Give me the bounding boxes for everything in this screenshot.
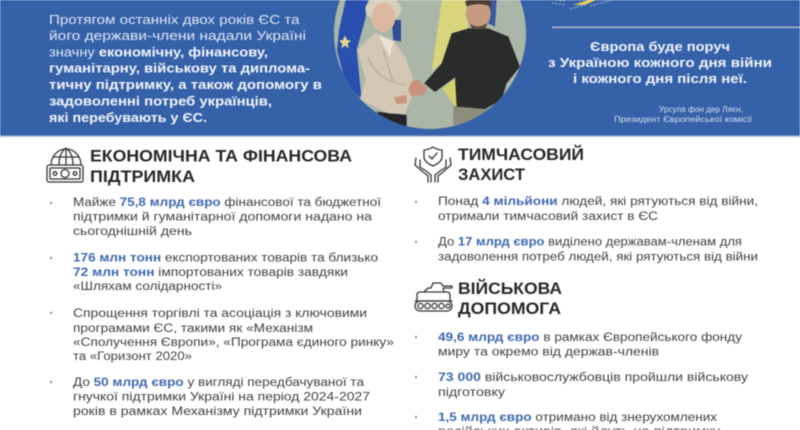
- bullet: 75.8 billion: підтримки й гуманітарної допомоги надано на: [73, 212, 373, 224]
- intro text block: значну економічну, фінансову,: [49, 46, 268, 60]
- heading: ТИМЧАСОВИЙ: [458, 145, 584, 164]
- bullet: 50 billion facility: [50, 377, 370, 418]
- bullet: 50 billion facility: гнучкої підтримки Україні на період 2024-2027: [73, 392, 370, 404]
- quote attribution: Урсула фон дер Ляєн,: [659, 105, 743, 114]
- bullet: trade and association: програмами ЄС, такими як «Механізм: [73, 323, 313, 335]
- panel: blue header band: [0, 0, 800, 140]
- photo: two leaders shaking hands: [330, 0, 530, 140]
- quote attribution: [614, 105, 753, 124]
- bullet: 50 billion facility: років в рамках Механізму підтримки України: [73, 406, 362, 418]
- bullet: 50 billion facility: До 50 млрд євро у вигляді передбачуваної та: [73, 377, 365, 389]
- bullet: solidarity lanes: «Шляхам солідарності»: [73, 281, 222, 293]
- heading: [458, 279, 562, 318]
- intro text block: гуманітарну, військову та диплома-: [49, 62, 310, 76]
- bullet: 73 000 troops: [415, 372, 748, 399]
- bullet: trade and association: [50, 308, 394, 363]
- bullet: 4 million: Понад 4 мільйони людей, які рятуються від війни,: [438, 196, 758, 208]
- bullet: trade and association: Спрощення торгівлі та асоціація з ключовими: [73, 308, 367, 320]
- panel: temporary protection: [415, 145, 758, 264]
- quote attribution: Президент Європейської комісії: [614, 115, 753, 124]
- bullet: trade and association: «Сполучення Європи», «Програма єдиного ринку»: [73, 337, 394, 349]
- intro text block: Протягом останніх двох років ЄС та: [49, 13, 300, 27]
- bullet: trade and association: та «Горизонт 2020»: [73, 351, 192, 363]
- bullet: 73 000 troops: підготовку: [438, 387, 505, 399]
- bullet: 49.6 billion: [415, 332, 742, 358]
- quote: з Україною кожного дня війни: [548, 55, 772, 70]
- bullet: 49.6 billion: миру та окремо від держав-членів: [438, 346, 659, 358]
- bullet: 75.8 billion: сьогоднішній день: [73, 226, 192, 238]
- intro text block: які перебувають у ЄС.: [49, 111, 207, 125]
- heading: [90, 146, 352, 186]
- bullet: 75.8 billion: Майже 75,8 млрд євро фінансової та бюджетної: [73, 197, 382, 209]
- intro text block: його держави-члени надали Україні: [49, 29, 306, 43]
- heading: [458, 145, 584, 184]
- bullet: 75.8 billion: [50, 197, 382, 238]
- heading: ВІЙСЬКОВА: [458, 279, 562, 298]
- bullet: solidarity lanes: 72 млн тонн імпортованих товарів завдяки: [73, 267, 348, 279]
- bullet: 1.5 billion: 1,5 млрд євро отримано від знерухомлених: [438, 412, 717, 424]
- icon: tank: [415, 283, 452, 311]
- bullet: 17 billion: [415, 236, 758, 264]
- bullet: 73 000 troops: 73 000 військовослужбовців пройшли військову: [438, 372, 748, 384]
- decorative flag brush strokes: [552, 0, 612, 9]
- bullet: 4 million: отримали тимчасовий захист в ЄС: [438, 211, 658, 223]
- quote: [548, 39, 772, 86]
- heading: ДОПОМОГА: [458, 299, 561, 318]
- bullet: 17 billion: До 17 млрд євро виділено державам-членам для: [438, 236, 742, 248]
- heading: ПІДТРИМКА: [90, 167, 195, 186]
- bullet: solidarity lanes: [50, 252, 378, 293]
- bullet: solidarity lanes: 176 млн тонн експортованих товарів та близько: [73, 252, 378, 264]
- quote: Європа буде поруч: [590, 39, 730, 54]
- panel: military assistance: [415, 279, 748, 430]
- bullet: 49.6 billion: 49,6 млрд євро в рамках Європейського фонду: [438, 332, 742, 344]
- quote: і кожного дня після неї.: [573, 71, 747, 86]
- intro text block: тичну підтримку, а також допомогу в: [49, 78, 322, 92]
- intro text block: задоволенні потреб українців,: [49, 94, 272, 108]
- bullet: 4 million: [415, 196, 758, 223]
- bullet: 1.5 billion: [415, 412, 720, 430]
- divider line: [552, 26, 800, 28]
- panel: economic and financial support: [47, 146, 394, 418]
- icon: globe and banknote: [47, 148, 83, 182]
- intro text block: [49, 13, 322, 125]
- heading: ЗАХИСТ: [458, 165, 526, 184]
- icon: hands holding shield: [415, 147, 451, 182]
- bullet: 17 billion: задоволення потреб людей, які рятуються від війни: [438, 252, 758, 264]
- heading: ЕКОНОМІЧНА ТА ФІНАНСОВА: [90, 146, 352, 166]
